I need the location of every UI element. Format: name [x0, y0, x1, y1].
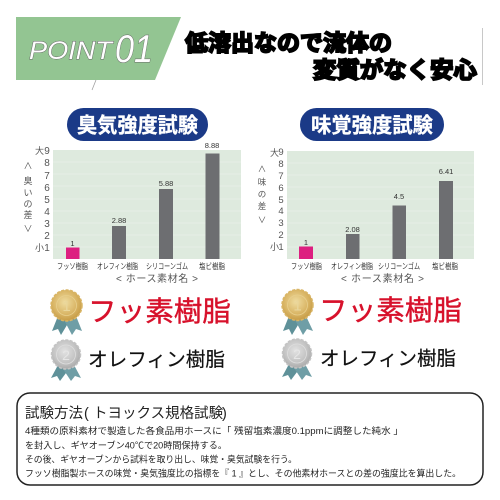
bar chart: taste: 2.08: [345, 225, 360, 234]
bar chart: odor: 8: [44, 158, 50, 169]
bar chart: taste: < ホース素材名 >: [341, 272, 424, 285]
bar chart: odor: 9: [44, 146, 50, 157]
bar chart: odor: ∨: [23, 224, 33, 234]
bar chart: taste: 大: [270, 147, 279, 158]
bar chart: taste: 6.41: [439, 167, 453, 176]
bar chart: taste: シリコーンゴム: [378, 261, 420, 271]
bar chart: taste: 5: [278, 195, 284, 206]
bar chart: taste: ∨: [258, 215, 266, 225]
bar chart: odor: 6: [44, 183, 50, 194]
bar chart: odor: 8.88: [205, 141, 219, 150]
bar chart: odor: ∧: [23, 161, 33, 171]
bar chart: odor: フッソ樹脂: [57, 261, 88, 271]
bar chart: odor: 7: [44, 171, 50, 182]
bar chart: odor: < ホース素材名 >: [116, 272, 198, 285]
icon: silver medal: 2: [293, 346, 301, 362]
icon: gold medal: 1: [62, 298, 71, 315]
point label: 01: [115, 28, 153, 71]
bar chart: taste: [258, 147, 474, 285]
bar chart: odor: 5: [44, 195, 50, 206]
bar chart: taste: 9: [278, 147, 284, 158]
icon: gold medal: [282, 290, 313, 335]
test method heading: トヨックス規格試験: [93, 405, 224, 422]
bar chart: odor: 大: [35, 145, 44, 156]
bar chart: taste: 小: [270, 242, 279, 252]
bar chart: taste: 6: [278, 183, 284, 194]
icon: silver medal: 2: [62, 347, 70, 363]
bar chart: odor: 塩ビ樹脂: [199, 261, 225, 271]
first place label: フッ素樹脂: [319, 295, 462, 326]
bar chart: taste: 塩ビ樹脂: [432, 261, 458, 271]
bar chart: taste: 7: [278, 171, 284, 182]
test method heading: 試験方法: [25, 405, 83, 422]
test method heading: (: [84, 406, 89, 422]
bar chart: taste: 1: [278, 242, 284, 253]
heading: odor test pill: 臭気強度試験: [77, 114, 198, 138]
bar chart: taste: 8: [278, 159, 284, 170]
bar chart: odor: 小: [35, 243, 44, 253]
bar chart: taste: 味: [258, 177, 267, 187]
test method description: その後、ギヤオーブンから試料を取り出し、味覚・臭気試験を行う。: [25, 454, 297, 464]
ranking: taste: [282, 290, 462, 380]
panel: odor intensity test: [23, 108, 241, 285]
bar chart: odor: 4: [44, 207, 50, 218]
bar chart: odor: 2.88: [112, 216, 126, 225]
test method description: [25, 425, 461, 478]
bar chart: taste: 4.5: [394, 192, 404, 201]
bar chart: odor: オレフィン樹脂: [97, 261, 138, 271]
second place label: オレフィン樹脂: [88, 349, 225, 371]
test method description: フッソ樹脂製ホースの味覚・臭気強度比の指標を『 1 』とし、その他素材ホースとの差の強度比を算出した。: [25, 468, 461, 478]
title: [185, 31, 478, 83]
bar chart: taste: ∧: [258, 164, 266, 174]
bar chart: taste: の: [258, 189, 266, 199]
bar chart: odor: い: [23, 188, 33, 198]
bar chart: odor: 差: [23, 209, 33, 220]
bar chart: taste: 差: [258, 201, 267, 211]
bar chart: odor: 3: [44, 219, 50, 230]
bar chart: odor: 臭: [23, 175, 33, 186]
heading: taste test pill: 味覚強度試験: [311, 114, 433, 138]
point label: [29, 28, 153, 71]
bar chart: taste: フッソ樹脂: [291, 261, 322, 271]
test method heading: ): [222, 406, 227, 422]
icon: gold medal: 1: [293, 298, 302, 314]
bar chart: odor: [23, 141, 241, 285]
test method description: 4種類の原料素材で製造した各食品用ホースに「 残留塩素濃度0.1ppmに調整した純水 」: [25, 425, 403, 436]
header banner: [16, 17, 482, 90]
panel: taste intensity test: [258, 108, 474, 285]
bar chart: taste: 2: [278, 230, 284, 241]
title: 変質がなく安心: [313, 57, 478, 83]
bar chart: taste: 3: [278, 218, 284, 229]
bar chart: odor: 2: [44, 231, 50, 242]
icon: silver medal: [51, 340, 81, 381]
title: 低溶出なので流体の: [185, 31, 392, 56]
point label: POINT: [29, 37, 114, 65]
bar chart: odor: 1: [44, 243, 50, 254]
icon: silver medal: [282, 339, 312, 380]
first place label: フッ素樹脂: [88, 296, 231, 327]
heading: odor test pill: [67, 108, 208, 141]
panel: test method: [17, 393, 483, 485]
heading: taste test pill: [300, 108, 444, 141]
bar chart: odor: の: [23, 199, 33, 209]
second place label: オレフィン樹脂: [320, 348, 456, 370]
icon: gold medal: [51, 290, 82, 335]
bar chart: taste: 4: [278, 206, 284, 217]
bar chart: odor: 1: [70, 239, 75, 248]
test method description: を封入し、ギヤオーブン40℃で20時間保持する。: [25, 440, 227, 450]
bar chart: taste: オレフィン樹脂: [331, 261, 373, 271]
bar chart: taste: 1: [304, 238, 308, 247]
bar chart: odor: シリコーンゴム: [146, 261, 188, 271]
ranking: odor: [51, 290, 231, 381]
bar chart: odor: 5.88: [159, 179, 173, 188]
